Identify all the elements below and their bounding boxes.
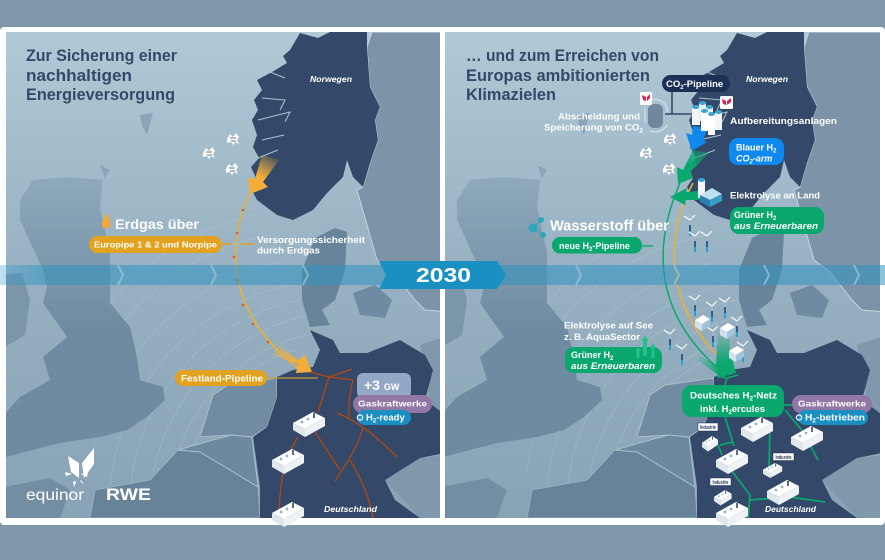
pill: Blauer H2: -arm	[753, 154, 772, 164]
pill: neue H2-Pipeline: 2	[589, 247, 593, 253]
green H2 network	[717, 375, 825, 518]
pill: Gaskraftwerke left	[353, 395, 432, 413]
pill: H2-ready: H	[366, 412, 373, 424]
title right: Klimazielen	[466, 86, 556, 104]
pipeline: Europipe	[236, 193, 300, 370]
pill: Festland-Pipeline: Festland-Pipeline	[181, 374, 263, 384]
text: Abscheidung: 2	[639, 128, 644, 134]
tag: Industrie 1	[698, 423, 718, 431]
icon: molecule	[528, 217, 546, 238]
pill: Europipe	[89, 236, 222, 253]
pill: CO2-Pipeline	[662, 75, 730, 92]
year label: 2030	[416, 265, 471, 287]
text: Elektrolyse auf See	[564, 320, 653, 342]
tag: Industrie 2	[773, 453, 794, 461]
arrow: offshore tail	[692, 352, 722, 376]
text: Elektrolyse auf See: z. B. AquaSector	[564, 332, 641, 342]
tag: Industrie 2: Industrie	[776, 455, 792, 461]
text: Elektrolyse auf See: Elektrolyse auf See	[564, 320, 653, 330]
pill: Blauer H2: CO	[736, 154, 750, 164]
pill: Gaskraftwerke right: Gaskraftwerke	[798, 398, 866, 408]
brown gas network	[279, 369, 397, 518]
left base map	[0, 32, 460, 518]
pill: H2-ready	[357, 410, 411, 425]
pill: Deutsches H2-Netz: 2	[750, 396, 754, 402]
gas power plants left	[272, 412, 325, 527]
pill: CO2-Pipeline: CO	[666, 79, 680, 90]
icon: tile processing	[720, 96, 733, 109]
pipeline markers	[233, 209, 269, 343]
hydrogen power plants	[716, 417, 823, 527]
pill: Grüner H2 See: aus Erneuerbaren	[571, 361, 656, 371]
pill: Blauer H2: 2	[748, 160, 754, 166]
CO2 pipeline lines	[665, 92, 693, 114]
icon: offshore up arrows	[635, 336, 656, 358]
title right: … und zum Erreichen von	[466, 47, 659, 65]
timeline band	[0, 261, 885, 289]
connector: supply security	[222, 243, 254, 245]
right base map	[427, 32, 885, 518]
panel: right, Wasserstoff 2030	[427, 32, 885, 527]
title left	[26, 47, 178, 104]
arrow: 2030	[379, 261, 506, 289]
icon: RWE/Equinor tile storage	[640, 92, 652, 105]
panel: left, Erdgas today	[0, 32, 460, 527]
pill: neue H2-Pipeline: neue H	[559, 241, 589, 251]
arrow: blue hydrogen	[686, 126, 708, 151]
pill: Deutsches H2-Netz: 2	[728, 410, 732, 416]
arrow: green into Germany	[716, 333, 736, 378]
text: Versorgungssicherheit: Versorgungssicherheit	[257, 235, 365, 245]
electrolysis on land	[698, 178, 722, 207]
pill: Europipe: Europipe 1 & 2 und Norpipe	[94, 240, 217, 250]
pill: neue H2-Pipeline: -Pipeline	[592, 241, 630, 251]
text: Abscheidung	[544, 112, 644, 134]
Erdgas heading: Erdgas über	[115, 216, 200, 232]
pill: Grüner H2 Land: Grüner H	[734, 210, 773, 220]
small industry plants	[702, 436, 782, 506]
logo: RWE: RWE	[106, 485, 151, 504]
pill: CO2-Pipeline: -Pipeline	[684, 79, 723, 90]
pill: Blauer H2	[729, 138, 784, 166]
label: Aufbereitungsanlagen: Aufbereitungsanlagen	[730, 116, 837, 126]
text: Versorgungssicherheit	[257, 235, 365, 256]
pill: Grüner H2 Land: aus Erneuerbaren	[734, 221, 819, 231]
label: Elektrolyse an Land: Elektrolyse an Land	[730, 190, 820, 200]
pill: Deutsches H2-Netz: ercules	[732, 404, 765, 415]
tag: Industrie 3: Industrie	[712, 480, 729, 486]
pill: CO2-Pipeline: 2	[680, 85, 684, 91]
text: Abscheidung: Speicherung von CO	[544, 122, 633, 132]
pill: H2-ready: 2	[373, 418, 377, 424]
pill: Deutsches H2-Netz: inkl. H	[700, 404, 729, 415]
offshore platforms right	[640, 133, 676, 175]
pipeline: green H2	[663, 183, 720, 370]
tag: Industrie 3	[710, 478, 731, 486]
pill: Grüner H2 See: Grüner H	[571, 350, 610, 360]
offshore electrolysis platforms	[695, 315, 744, 362]
logo: Equinor: equinor	[26, 487, 84, 504]
pill: Grüner H2 See: 2	[610, 356, 614, 362]
pill: Blauer H2: 2	[773, 148, 777, 154]
text: Versorgungssicherheit: durch Erdgas	[257, 246, 320, 256]
arrow: green from electrolysis	[670, 188, 700, 205]
pipeline: Festland	[267, 377, 318, 379]
arrow: green from Norway	[677, 150, 709, 184]
title left: Energieversorgung	[26, 86, 175, 104]
pill: Deutsches H2-Netz: -Netz	[753, 390, 777, 402]
turbines north	[684, 215, 712, 252]
pill: H2-betrieben: 2	[812, 418, 817, 424]
title left: nachhaltigen	[26, 67, 132, 85]
label: Norwegen: Norwegen	[310, 74, 352, 84]
logo: Equinor	[26, 448, 94, 504]
arrow: gas from Norway	[248, 155, 279, 194]
label: Norwegen right: Norwegen	[746, 74, 788, 84]
callout: +3 GW: +3 GW	[364, 377, 400, 393]
tanks: processing plants	[692, 101, 722, 135]
Wasserstoff heading	[528, 217, 669, 238]
CO2 storage	[645, 99, 667, 132]
icon: flame	[102, 213, 110, 228]
arrow: gas to Germany	[272, 345, 312, 373]
pill: Grüner H2 See	[565, 347, 662, 373]
title left: Zur Sicherung einer	[26, 47, 178, 65]
pipeline: orange	[674, 183, 716, 354]
text: Abscheidung: Abscheidung und	[558, 112, 640, 122]
turbines south	[664, 295, 748, 365]
pill: Gaskraftwerke right	[792, 395, 872, 413]
label: Deutschland left: Deutschland	[324, 504, 378, 514]
pill: H2-ready: -ready	[376, 412, 405, 424]
title right	[466, 47, 659, 104]
pill: Grüner H2 Land: 2	[773, 216, 777, 222]
pill: Gaskraftwerke left: Gaskraftwerke	[358, 398, 427, 408]
pill: Festland-Pipeline	[175, 370, 267, 386]
callout: +3 GW	[357, 373, 411, 398]
Wasserstoff heading: Wasserstoff über	[550, 218, 669, 234]
pill: H2-betrieben: -betrieben	[816, 412, 865, 422]
pill: Deutsches H2-Netz: Deutsches H	[690, 390, 748, 402]
tag: Industrie 1: Industrie	[700, 425, 716, 431]
pill: Grüner H2 Land	[730, 207, 824, 234]
title right: Europas ambitionierten	[466, 67, 650, 85]
pill: H2-betrieben	[796, 410, 868, 425]
label: Deutschland right: Deutschland	[765, 504, 817, 514]
connector: H2 pipeline	[642, 245, 653, 247]
pill: Deutsches H2-Netz	[682, 385, 784, 417]
offshore platforms	[203, 133, 239, 175]
pill: neue H2-Pipeline	[552, 237, 642, 254]
pill: Blauer H2: Blauer H	[736, 142, 773, 152]
pill: H2-betrieben: H	[805, 412, 812, 422]
